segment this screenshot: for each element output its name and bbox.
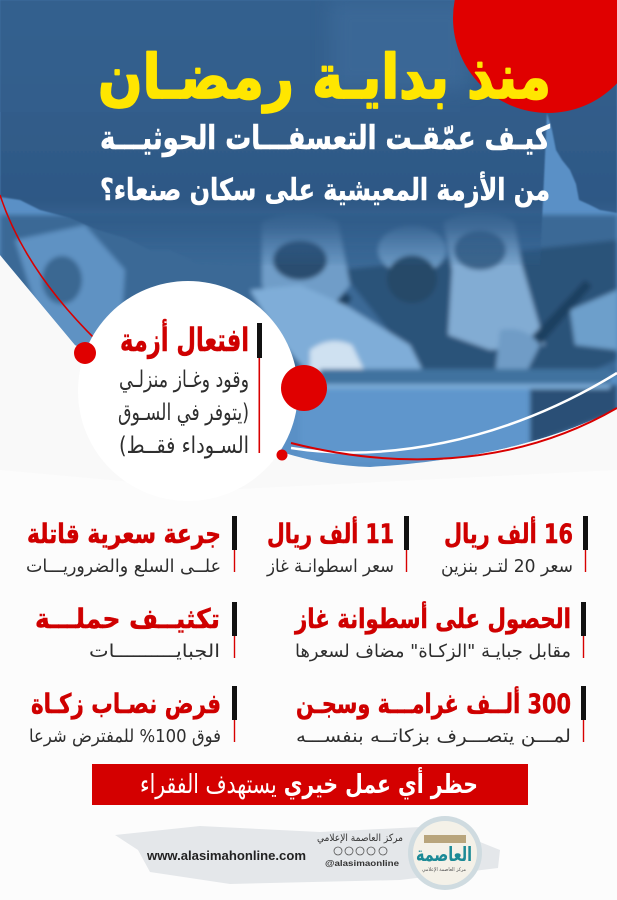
right figures — [570, 290, 617, 350]
fact: intensified campaign — [35, 602, 237, 662]
callout text line 2: (يتوفر في السـوق — [118, 400, 249, 426]
logo: مركز العاصمة الإعلامي — [422, 867, 466, 873]
fact: 300 thousand fine and prison: 300 ألــف غرامـــة وسجـن — [296, 686, 571, 720]
fact: zakat threshold: فرض نصـاب زكـاة — [31, 689, 221, 720]
callout text line 3: السـوداء فقــط) — [119, 433, 249, 459]
fact: 11 thousand riyals: 11 ألف ريال — [267, 516, 394, 550]
boat — [300, 384, 530, 460]
center man — [260, 222, 352, 302]
fact: 300 thousand fine and prison: لمـــن يتصـــرف بزكاتــه بنفســـه — [296, 726, 571, 747]
callout heading: افتعال أزمة — [120, 319, 249, 359]
fact: 11 thousand riyals: سعر اسطوانـة غاز — [266, 556, 394, 577]
website url: www.alasimahonline.com — [146, 848, 306, 863]
panel: fact grid — [26, 516, 588, 747]
red banner: حظر أي عمل خيري يستهدف الفقراء — [140, 767, 478, 800]
dark clothing — [347, 239, 617, 370]
fact: zakat threshold — [29, 686, 237, 747]
fact: 16 thousand riyals: سعر 20 لتـر بنزين — [441, 556, 573, 577]
logo — [408, 816, 482, 890]
fact: 300 thousand fine and prison — [296, 686, 586, 747]
fact: getting a gas cylinder — [293, 601, 586, 662]
social handle: @alasimaonline — [325, 858, 399, 868]
fact: 16 thousand riyals: 16 ألف ريال — [444, 516, 573, 550]
white and red swooshes — [291, 373, 617, 459]
fact: deadly price dose: علــى السلع والضروريـــات — [26, 556, 221, 577]
fact: 16 thousand riyals — [441, 516, 588, 577]
media centre name: مركز العاصمة الإعلامي — [317, 833, 403, 844]
footer brush strip — [115, 826, 500, 884]
fact: intensified campaign: تكثيــف حملـــة — [35, 604, 220, 635]
panel: crisis callout — [118, 319, 262, 459]
third man — [378, 226, 446, 274]
header photo: armed men — [0, 0, 617, 480]
logo: العاصمة — [416, 842, 472, 866]
fact: deadly price dose — [26, 516, 237, 577]
dark overlay with torn edge — [0, 0, 617, 265]
callout text line 1: وقود وغـاز منزلـي — [119, 367, 249, 393]
fact: deadly price dose: جرعة سعرية قاتلة — [27, 519, 221, 550]
red dot small — [276, 450, 288, 460]
callout bar — [257, 323, 262, 453]
red circle top right — [453, 0, 617, 113]
red dot large — [281, 365, 327, 411]
fact: getting a gas cylinder: مقابل جبايـة "الزكـاة" مضاف لسعرها — [295, 641, 571, 662]
left man — [14, 224, 127, 346]
main man — [444, 212, 545, 350]
social icons — [334, 847, 387, 855]
fact: intensified campaign: الجبايــــــــــات — [89, 641, 220, 662]
fact: zakat threshold: فوق 100% للمفترض شرعا — [29, 726, 221, 747]
left red curve — [0, 195, 98, 342]
red banner — [92, 764, 528, 805]
title: منذ بدايـة رمضـان — [98, 42, 551, 113]
white clothing — [250, 285, 425, 375]
red dot left — [74, 342, 96, 364]
fact: 11 thousand riyals — [266, 516, 409, 577]
white circle panel — [78, 281, 298, 501]
